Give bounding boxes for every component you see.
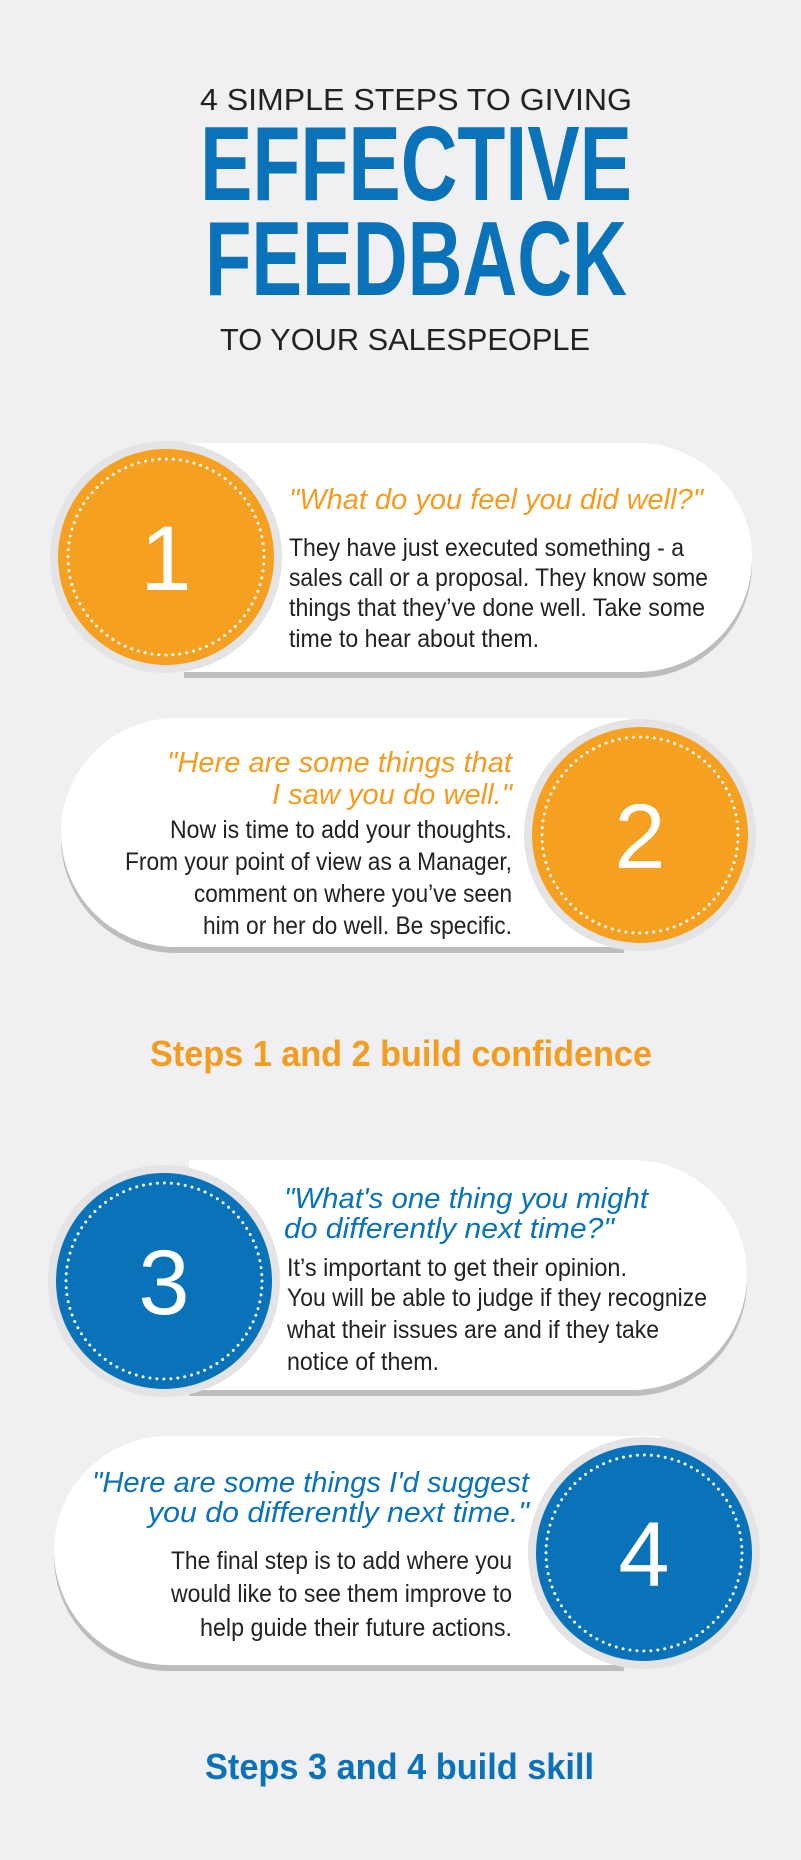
title: TO YOUR SALESPEOPLE — [220, 322, 590, 357]
icon: circle 2 — [524, 719, 756, 951]
text: step 3: You will be able to judge if they recognize — [287, 1284, 707, 1312]
text: step 2: I saw you do well." — [272, 779, 514, 811]
icon: circle 2: 2 — [614, 786, 666, 888]
panel: step 1 — [50, 441, 752, 678]
text: step 2: him or her do well. Be specific. — [203, 912, 512, 940]
heading: steps 1 and 2: Steps 1 and 2 build confidence — [150, 1033, 652, 1074]
title: 4 SIMPLE STEPS TO GIVING — [200, 82, 632, 117]
text: step 4: would like to see them improve to — [170, 1580, 512, 1608]
text: step 2: From your point of view as a Manager, — [125, 848, 512, 876]
icon: circle 4 — [528, 1437, 760, 1669]
text: step 1: They have just executed something - a — [289, 534, 684, 562]
text: step 3: "What's one thing you might — [284, 1183, 650, 1215]
text: step 4: you do differently next time." — [146, 1497, 531, 1529]
icon: circle 4: 4 — [618, 1504, 670, 1606]
text: step 2: Now is time to add your thoughts. — [170, 816, 512, 844]
text: step 1: time to hear about them. — [289, 625, 539, 653]
title: EFFECTIVE — [200, 105, 632, 223]
icon: circle 1 — [50, 441, 282, 673]
text: step 4 — [92, 1467, 531, 1642]
text: step 2 — [125, 747, 514, 940]
panel: step 4 — [54, 1436, 760, 1671]
icon: circle 3 — [48, 1165, 280, 1397]
title: FEEDBACK — [205, 200, 627, 318]
text: step 2: "Here are some things that — [167, 747, 514, 779]
text: step 3: what their issues are and if they take — [286, 1316, 659, 1344]
icon: circle 3: 3 — [138, 1232, 190, 1334]
icon: circle 1: 1 — [140, 508, 192, 610]
text: step 4: The final step is to add where you — [171, 1547, 512, 1575]
text: step 2: comment on where you’ve seen — [194, 880, 512, 908]
panel: step 3 — [48, 1160, 747, 1397]
text: step 4: help guide their future actions. — [200, 1614, 512, 1642]
text: step 4: "Here are some things I'd suggest — [92, 1467, 531, 1499]
text: step 1: "What do you feel you did well?" — [289, 484, 705, 516]
text: step 1: things that they’ve done well. Take some — [289, 594, 705, 622]
text: step 3: notice of them. — [287, 1348, 439, 1376]
text: step 3: do differently next time?" — [284, 1213, 616, 1245]
text: step 1 — [289, 484, 708, 653]
text: step 3 — [284, 1183, 707, 1376]
text: step 1: sales call or a proposal. They know some — [289, 564, 708, 592]
text: step 3: It’s important to get their opinion. — [287, 1254, 627, 1282]
panel: step 2 — [61, 718, 756, 953]
heading: steps 3 and 4: Steps 3 and 4 build skill — [205, 1746, 594, 1787]
title — [200, 82, 632, 357]
